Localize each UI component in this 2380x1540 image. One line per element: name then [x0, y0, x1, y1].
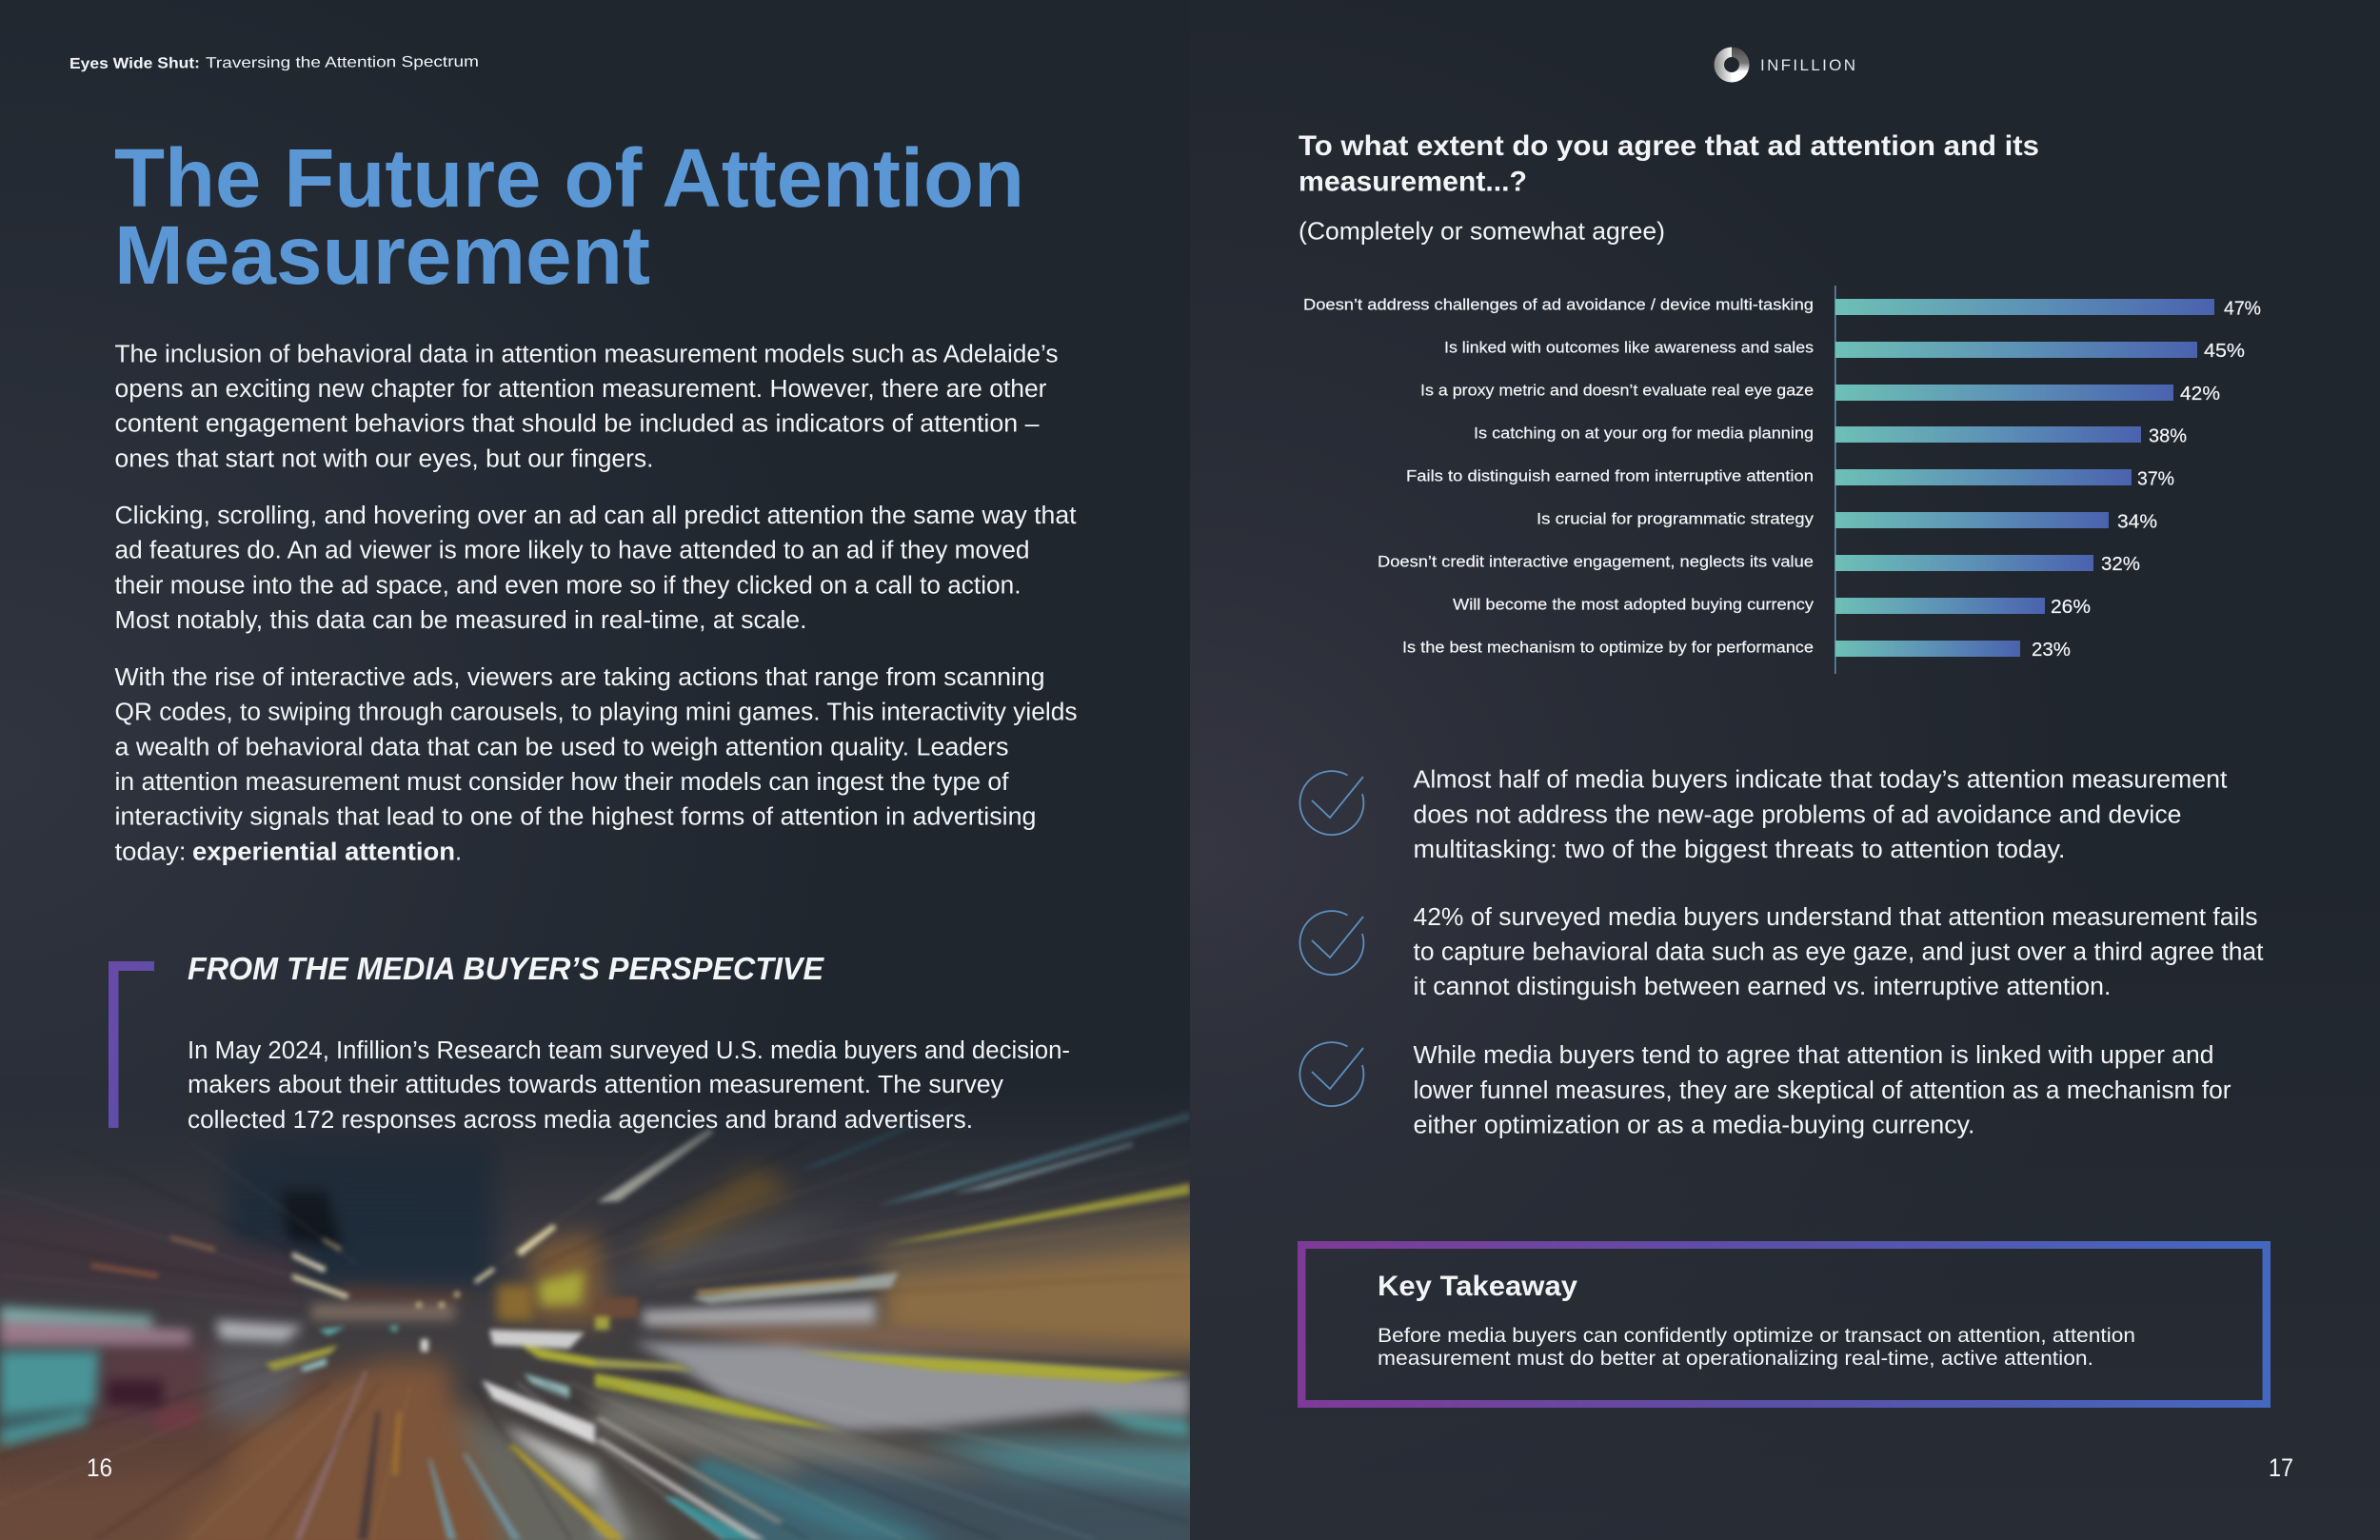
- text block: insight 1: [1413, 767, 2228, 863]
- key takeaway text: Before media buyers can confidently optimize or transact on attention, attention: [1378, 1325, 2135, 1347]
- text block: paragraph 2: ad features do. An ad viewer is more likely to have attended to an ad if they moved: [114, 538, 1030, 564]
- icon: check circle 3: [1299, 1042, 1363, 1106]
- bar values: 42%: [2180, 383, 2220, 405]
- text block: paragraph 3: experiential attention: [192, 839, 455, 865]
- header subtitle: Traversing the Attention Spectrum: [206, 54, 479, 71]
- category labels: [1303, 297, 1815, 657]
- category labels: Is linked with outcomes like awareness and sales: [1444, 339, 1814, 356]
- radial streak texture: [270, 1250, 1187, 1540]
- icon: check circle 1: [1299, 771, 1363, 835]
- text block: paragraph 1: opens an exciting new chapter for attention measurement. However, there are other: [114, 376, 1047, 403]
- text block: insight 3: lower funnel measures, they are skeptical of attention as a mechanism for: [1413, 1077, 2231, 1104]
- bar chart: [1303, 286, 2261, 674]
- page number 16: 16: [87, 1453, 112, 1482]
- text block: paragraph 1: content engagement behaviors that should be included as indicators of attention –: [114, 411, 1040, 438]
- text block: paragraph 3: interactivity signals that lead to one of the highest forms of attention in advertising: [114, 804, 1036, 831]
- text block: insight 2: to capture behavioral data such as eye gaze, and just over a third agree that: [1413, 938, 2264, 965]
- panel body text: In May 2024, Infillion’s Research team surveyed U.S. media buyers and decision-: [188, 1037, 1070, 1064]
- text block: insight 2: it cannot distinguish between earned vs. interruptive attention.: [1413, 974, 2112, 1000]
- text block: paragraph 3: today:: [114, 839, 187, 865]
- text block: paragraph 3: [114, 664, 1078, 865]
- text block: paragraph 2: Clicking, scrolling, and hovering over an ad can all predict attention the same way that: [114, 503, 1076, 529]
- text block: insight 3: While media buyers tend to agree that attention is linked with upper and: [1413, 1042, 2214, 1069]
- text block: insight 1: does not address the new-age problems of ad avoidance and device: [1413, 801, 2182, 828]
- panel body text: makers about their attitudes towards attention measurement. The survey: [188, 1072, 1003, 1098]
- panel: left page background: [0, 0, 1190, 1540]
- category labels: Is catching on at your org for media planning: [1474, 424, 1814, 442]
- text block: paragraph 1: The inclusion of behavioral data in attention measurement models such as Adelaide’s: [114, 341, 1059, 367]
- photo: motion blurred city lights: [0, 1066, 1190, 1540]
- panel body text: [188, 1037, 1070, 1134]
- bar values: 34%: [2117, 510, 2157, 533]
- text block: insight 1: Almost half of media buyers indicate that today’s attention measurement: [1413, 767, 2228, 794]
- text block: insight 2: [1413, 904, 2264, 1000]
- text block: paragraph 1: ones that start not with our eyes, but our fingers.: [114, 445, 653, 472]
- panel: from the media buyer's perspective: [109, 951, 1070, 1134]
- text block: insight 3: [1413, 1042, 2231, 1138]
- text block: paragraph 3: in attention measurement must consider how their models can ingest the type of: [114, 769, 1009, 796]
- bars: [1835, 299, 2214, 657]
- title: The Future of Attention: [114, 132, 1024, 225]
- bar values: 38%: [2149, 424, 2187, 447]
- bar values: 47%: [2224, 297, 2261, 320]
- icon: purple corner bracket: [109, 961, 154, 1128]
- logo: Infillion: INFILLION: [1760, 56, 1855, 74]
- category labels: Doesn’t credit interactive engagement, neglects its value: [1378, 554, 1814, 571]
- category labels: Is the best mechanism to optimize by for performance: [1402, 640, 1814, 657]
- bar values: 32%: [2101, 553, 2140, 575]
- gradient frame: [1298, 1241, 2271, 1408]
- text block: paragraph 3: .: [455, 839, 462, 865]
- text block: paragraph 2: their mouse into the ad space, and even more so if they clicked on a call to action.: [114, 572, 1021, 599]
- title: Measurement: [114, 209, 650, 302]
- running header: [69, 54, 479, 72]
- bar values: 23%: [2032, 639, 2071, 661]
- chart heading: To what extent do you agree that ad attention and its: [1299, 130, 2039, 162]
- chart subheading: (Completely or somewhat agree): [1299, 217, 1665, 246]
- text block: paragraph 2: Most notably, this data can be measured in real-time, at scale.: [114, 607, 806, 634]
- key takeaway text: measurement must do better at operationalizing real-time, active attention.: [1378, 1348, 2093, 1370]
- text block: paragraph 3: a wealth of behavioral data that can be used to weigh attention quality. Leaders: [114, 734, 1009, 760]
- text block: paragraph 3: QR codes, to swiping through carousels, to playing mini games. This interactivity yields: [114, 700, 1078, 726]
- panel body text: collected 172 responses across media agencies and brand advertisers.: [188, 1107, 973, 1134]
- key takeaway heading: Key Takeaway: [1378, 1271, 1577, 1302]
- text block: paragraph 1: [114, 341, 1059, 472]
- bar values: 26%: [2051, 596, 2091, 618]
- text block: insight 2: 42% of surveyed media buyers understand that attention measurement fails: [1413, 904, 2258, 931]
- icon: check circle 2: [1299, 911, 1363, 975]
- page number 17: 17: [2269, 1453, 2293, 1482]
- category labels: Fails to distinguish earned from interruptive attention: [1406, 468, 1814, 485]
- panel: right page background: [1190, 0, 2380, 1540]
- text block: paragraph 3: With the rise of interactive ads, viewers are taking actions that range from scanning: [114, 664, 1045, 691]
- bar values: [2032, 297, 2261, 661]
- logo: Infillion: [1714, 48, 1855, 82]
- chart heading: measurement...?: [1299, 166, 1527, 198]
- header bold title: Eyes Wide Shut:: [69, 55, 200, 72]
- bar values: 37%: [2137, 468, 2174, 489]
- text block: insight 3: either optimization or as a media-buying currency.: [1413, 1112, 1974, 1138]
- text block: paragraph 2: [114, 503, 1076, 634]
- category labels: Is a proxy metric and doesn’t evaluate real eye gaze: [1420, 383, 1814, 400]
- bar values: 45%: [2204, 340, 2245, 362]
- category labels: Will become the most adopted buying currency: [1453, 596, 1815, 613]
- text block: insight 1: multitasking: two of the biggest threats to attention today.: [1413, 837, 2066, 863]
- title: [114, 132, 1024, 302]
- category labels: Doesn’t address challenges of ad avoidance / device multi-tasking: [1303, 297, 1814, 314]
- panel heading: FROM THE MEDIA BUYER’S PERSPECTIVE: [188, 951, 824, 986]
- panel: key takeaway: [1298, 1241, 2271, 1408]
- chart heading: [1299, 130, 2039, 198]
- category labels: Is crucial for programmatic strategy: [1537, 510, 1815, 527]
- key takeaway text: [1378, 1325, 2135, 1370]
